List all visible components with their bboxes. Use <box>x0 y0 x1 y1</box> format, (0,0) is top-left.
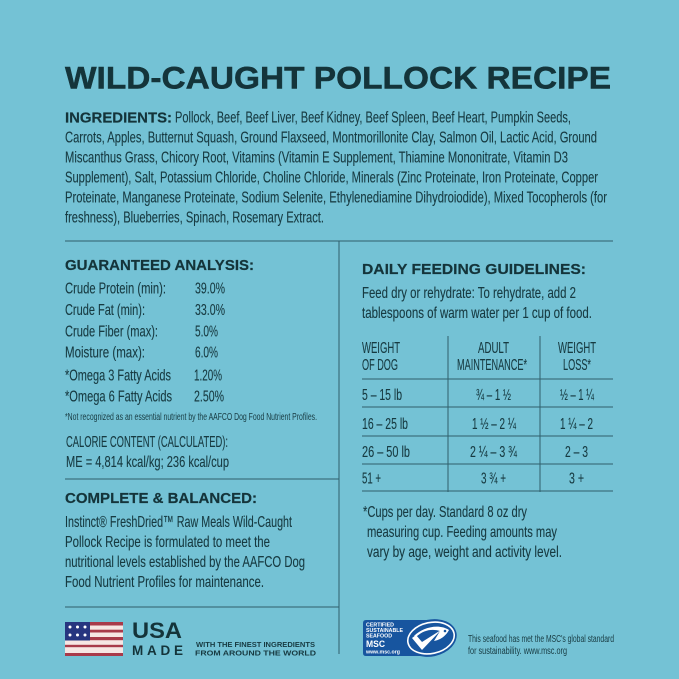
text block: MSC statement: This seafood has met the MSC's global standard <box>468 634 614 645</box>
table: feeding amounts: 26 – 50 lb <box>362 444 410 461</box>
footnote: cups per day: *Cups per day. Standard 8 oz dry <box>363 504 527 521</box>
table: feeding amounts: 1 ¼ – 2 <box>560 416 593 433</box>
text block: complete and balanced statement: Instinct® FreshDried™ Raw Meals Wild-Caught <box>65 514 292 531</box>
panel: ingredients <box>65 110 607 226</box>
table: nutrient values: 33.0% <box>195 302 225 319</box>
logo: MSC certified sustainable seafood: CERTIFIED <box>366 622 394 628</box>
table: feeding amounts: 3 + <box>569 470 584 488</box>
logo: MSC certified sustainable seafood: www.msc.org <box>365 650 400 656</box>
table: feeding amounts: MAINTENANCE* <box>457 357 527 374</box>
text block: rehydrate instructions: tablespoons of warm water per 1 cup of food. <box>362 305 592 322</box>
heading: daily feeding guidelines: DAILY FEEDING GUIDELINES: <box>362 262 586 278</box>
text block: complete and balanced statement: nutritional levels established by the AAFCO Dog <box>65 554 305 571</box>
table: nutrient values: *Omega 6 Fatty Acids <box>65 388 172 406</box>
logo: MSC certified sustainable seafood: MSC <box>366 639 385 650</box>
table: nutrient values: 6.0% <box>195 344 218 362</box>
table: feeding amounts <box>362 336 613 492</box>
title: WILD-CAUGHT POLLOCK RECIPE <box>65 60 611 96</box>
table: feeding amounts: 2 – 3 <box>565 444 588 461</box>
panel: daily feeding guidelines <box>362 262 613 561</box>
table: feeding amounts: 5 – 15 lb <box>362 387 402 404</box>
heading: complete and balanced: COMPLETE & BALANCED: <box>65 491 257 507</box>
footnote: cups per day: vary by age, weight and activity level. <box>367 544 562 561</box>
table: feeding amounts: 16 – 25 lb <box>362 416 408 433</box>
logo: MSC certified sustainable seafood: SEAFOOD <box>366 634 392 640</box>
panel: complete and balanced <box>65 491 305 591</box>
panel: guaranteed analysis <box>65 258 317 471</box>
table: feeding amounts: WEIGHT <box>362 340 400 357</box>
table: feeding amounts: WEIGHT <box>558 340 596 357</box>
text block: ingredients list: freshness), Blueberries, Spinach, Rosemary Extract. <box>65 210 324 226</box>
table: nutrient values: *Omega 3 Fatty Acids <box>65 368 171 384</box>
text block: finest ingredients: FROM AROUND THE WORLD <box>195 648 316 658</box>
table: feeding amounts: 3 ¾ + <box>481 470 506 488</box>
footnote: cups per day <box>363 504 562 561</box>
text block: rehydrate instructions: Feed dry or rehydrate: To rehydrate, add 2 <box>362 285 576 302</box>
text block: ingredients list <box>65 110 607 226</box>
table: feeding amounts: OF DOG <box>362 357 398 374</box>
logo: USA made: USA <box>132 618 182 643</box>
text block: complete and balanced statement: Food Nutrient Profiles for maintenance. <box>65 574 264 591</box>
text block: MSC statement <box>468 634 614 657</box>
table: feeding amounts: 2 ¼ – 3 ¾ <box>470 444 517 461</box>
logo: MSC certified sustainable seafood: SUSTAINABLE <box>366 628 403 634</box>
logo: MSC certified sustainable seafood <box>363 614 460 662</box>
table: nutrient values: 2.50% <box>194 388 224 406</box>
table: feeding amounts: ADULT <box>478 340 509 357</box>
table: feeding amounts: ¾ – 1 ½ <box>476 387 511 404</box>
heading: guaranteed analysis: GUARANTEED ANALYSIS: <box>65 258 254 274</box>
logo: USA made: MADE <box>132 643 183 658</box>
footnote: AAFCO: *Not recognized as an essential nutrient by the AAFCO Dog Food Nutrient Profiles. <box>65 412 317 423</box>
text block: calorie content: CALORIE CONTENT (CALCULATED): <box>66 434 228 451</box>
text block: complete and balanced statement <box>65 514 305 591</box>
table: nutrient values: 39.0% <box>195 280 225 298</box>
table: feeding amounts: 51 + <box>362 470 381 488</box>
footnote: cups per day: measuring cup. Feeding amounts may <box>367 524 557 541</box>
table: feeding amounts: ½ – 1 ¼ <box>560 387 594 404</box>
table: nutrient values: Crude Fiber (max): <box>65 324 158 340</box>
text block: calorie content <box>66 434 229 471</box>
table: nutrient values: Crude Protein (min): <box>65 280 166 298</box>
logo: USA made <box>132 618 183 658</box>
table: nutrient values: 5.0% <box>195 324 218 340</box>
icon: american flag <box>65 622 123 656</box>
text block: rehydrate instructions <box>362 285 592 322</box>
text block: finest ingredients <box>195 640 316 658</box>
heading: ingredients: INGREDIENTS: <box>65 110 172 126</box>
table: nutrient values <box>65 280 225 406</box>
text block: complete and balanced statement: Pollock Recipe is formulated to meet the <box>65 534 270 551</box>
table: feeding amounts: 1 ½ – 2 ¼ <box>472 416 516 433</box>
table: nutrient values: 1.20% <box>194 368 222 384</box>
table: nutrient values: Crude Fat (min): <box>65 302 145 319</box>
text block: finest ingredients: WITH THE FINEST INGREDIENTS <box>196 640 315 649</box>
table: feeding amounts: LOSS* <box>563 357 591 374</box>
text block: calorie content: ME = 4,814 kcal/kg; 236 kcal/cup <box>66 454 229 471</box>
text block: MSC statement: for sustainability. www.msc.org <box>468 646 567 657</box>
table: nutrient values: Moisture (max): <box>65 344 145 362</box>
